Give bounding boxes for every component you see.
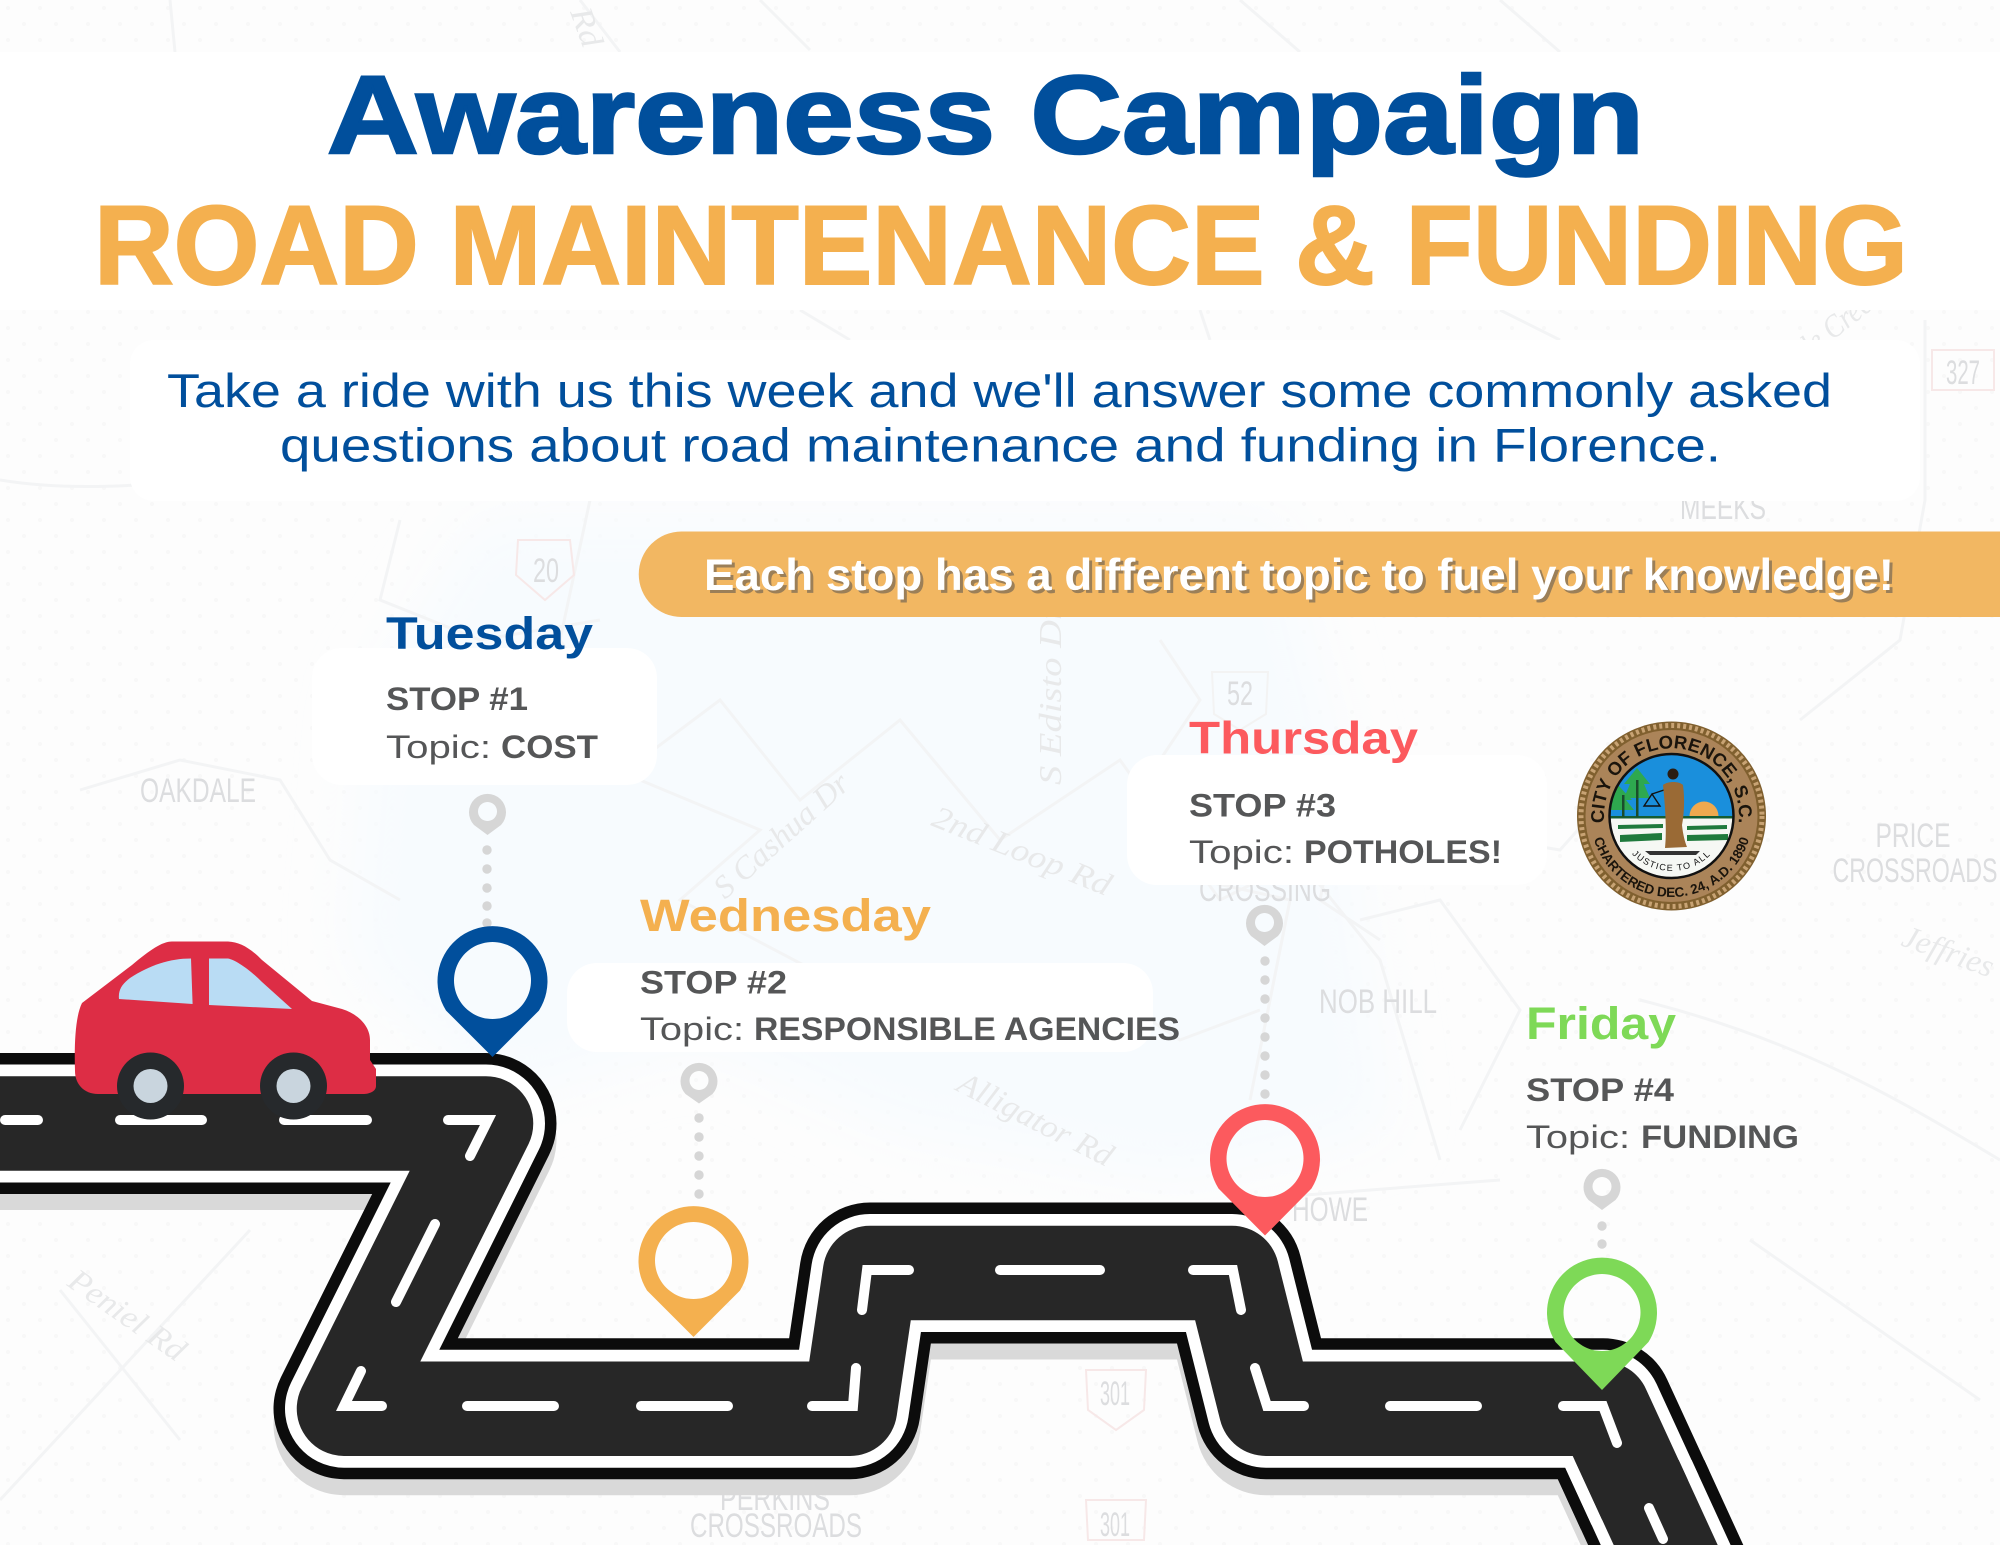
day label: Thursday [1189,712,1418,764]
road asphalt [0,1124,1718,1545]
title line 1: Awareness Campaign [327,54,1644,177]
car body [75,942,376,1094]
day label: Tuesday [386,608,593,659]
white box: Tuesday [312,648,657,785]
map background: OAKDALE [140,772,256,810]
white title band [0,52,2000,310]
map background: HOWE [1292,1191,1368,1229]
subtitle line 1: Take a ride with us this week and we'll answer some commonly asked [167,364,1832,417]
road shadow [0,1140,1736,1545]
banner text: Each stop has a different topic to fuel your knowledge! [704,551,1894,600]
map background: S Cashua Dr [706,764,856,905]
red map pin [1210,1104,1320,1236]
banner [639,532,2000,617]
topic: Topic: [386,729,491,765]
map background: 2nd Loop Rd [927,798,1118,903]
blue map pin [437,926,548,1057]
seal tan band [1586,730,1758,902]
map background: Peniel Rd [61,1261,194,1369]
map background: Rd [563,1,611,53]
map background: Jeffries [1898,918,1999,984]
topic: POTHOLES! [1304,834,1502,870]
small gray pin and dots [469,794,506,928]
title [94,54,1908,308]
small gray pin and dots [1246,905,1283,1099]
stop number: STOP #2 [640,964,787,1000]
car left window [119,958,193,1004]
map background: PRICE [1876,817,1950,855]
car right wheel [260,1052,327,1120]
stop 3: Thursday [1189,712,1502,1236]
map background: CROSSROADS [690,1507,862,1545]
banner pill [639,532,2000,617]
stop 2: Wednesday [638,890,1180,1337]
stop number: STOP #3 [1189,788,1336,824]
seal bottom text: CHARTERED DEC. 24, A.D. 1890 [1594,838,1748,897]
icon: City of Florence seal [1577,722,1766,910]
subtitle text [167,364,1832,472]
car right window [209,958,292,1009]
green map pin [1547,1258,1657,1390]
day label: Wednesday [640,890,931,941]
map background: Alligator Rd [950,1063,1121,1174]
topic [386,729,598,765]
topic: Topic: [1526,1119,1630,1155]
map background: S Edisto Dr [1032,604,1068,785]
white box: Wednesday [567,963,1153,1052]
seal inner ring [1610,754,1734,878]
orange map pin [638,1206,748,1337]
topic: Topic: [640,1011,744,1047]
banner text shadow: Each stop has a different topic to fuel your knowledge! [707,554,1897,603]
day label: Friday [1526,998,1676,1049]
stop 4: Friday [1526,998,1799,1390]
road [0,1120,1743,1545]
map background: 301 [1100,1375,1130,1413]
topic: COST [501,729,598,765]
road black edge [0,1124,1743,1545]
map background: 52 [1227,675,1253,713]
car left wheel [117,1052,184,1120]
stop 1: Tuesday [386,608,598,1057]
map background: MEEKS [1680,489,1766,527]
white box: Thursday [1127,755,1547,885]
seal rope ring [1577,722,1766,910]
road lane dashes [5,1120,1663,1539]
subtitle line 2: questions about road maintenance and funding in Florence. [280,418,1721,472]
seal scene [1610,755,1732,877]
seal top text: CITY OF FLORENCE, S.C. [1591,736,1752,822]
topic: FUNDING [1641,1119,1799,1155]
small gray pin and dots [1584,1169,1620,1249]
small gray pin and dots [680,1063,718,1199]
map background: PERKINS [720,1480,830,1518]
map background: 20 [533,552,559,590]
white subtitle band [130,340,1920,501]
map background: ile Creek [1787,277,1889,368]
map background: NOB HILL [1319,983,1437,1021]
map background: CROSSING [1199,871,1331,909]
stop number: STOP #4 [1526,1072,1674,1108]
seal motto: JUSTICE TO ALL [1632,850,1710,871]
topic: Topic: [1189,834,1294,870]
icon: red car [75,942,376,1120]
stop number: STOP #1 [386,681,528,717]
title line 2: ROAD MAINTENANCE & FUNDING [94,183,1908,308]
map background: 301 [1100,1506,1130,1544]
road white edge [0,1124,1731,1545]
topic [1189,834,1502,870]
topic [1526,1119,1799,1155]
topic: RESPONSIBLE AGENCIES [754,1011,1180,1047]
